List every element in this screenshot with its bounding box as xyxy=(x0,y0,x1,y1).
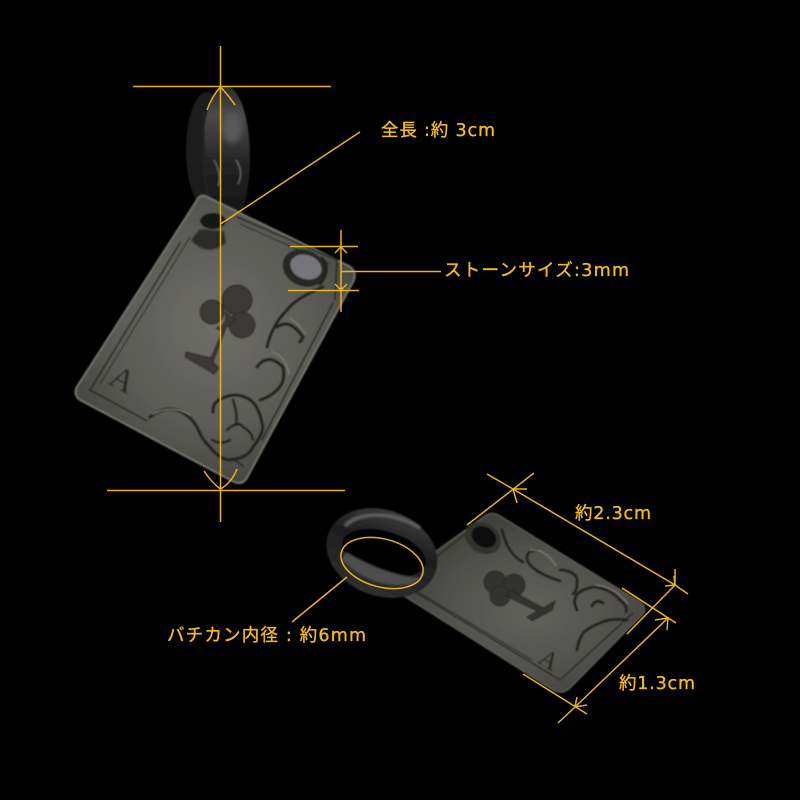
card body xyxy=(75,196,355,483)
arrow: bottom xyxy=(204,469,237,489)
card inner border xyxy=(90,217,337,466)
dimension: bail inner diameter xyxy=(292,529,429,622)
scroll ornament xyxy=(502,530,628,650)
pendant: upright view xyxy=(75,86,355,483)
arrow: width start xyxy=(513,489,527,503)
bail ring xyxy=(314,493,450,613)
leader: stone size xyxy=(341,270,441,272)
dimension: stone size xyxy=(288,230,441,312)
card body xyxy=(393,514,645,692)
letter A: A xyxy=(534,644,563,677)
icon: club suit xyxy=(484,571,555,621)
leader: bail diameter xyxy=(292,577,347,622)
label: 2.3cm: 約2.3cm xyxy=(575,504,651,524)
label: 1.3cm: 約1.3cm xyxy=(619,674,695,694)
dimension: total length xyxy=(107,46,360,522)
arrow: height end xyxy=(575,697,587,707)
scroll ornament xyxy=(150,287,323,460)
black stone xyxy=(276,242,332,294)
arrow: top xyxy=(207,87,235,110)
dimension: width 2.3cm xyxy=(467,473,688,634)
pendant: lying view xyxy=(314,493,645,692)
leader: total length xyxy=(220,132,360,224)
arrow: stone top xyxy=(335,247,347,253)
letter A: A xyxy=(103,359,142,402)
bail joint xyxy=(200,213,226,229)
bail ring xyxy=(186,86,250,230)
arrow: width end xyxy=(665,576,675,586)
card inner border xyxy=(402,524,633,680)
dimension: height 1.3cm xyxy=(523,588,676,723)
icon: club suit xyxy=(185,285,255,374)
arrow: height start xyxy=(655,618,668,630)
label: bail inner diameter: バチカン内径 : 約6mm xyxy=(167,626,366,646)
arrow: stone bottom xyxy=(335,284,347,290)
label: total length: 全長 :約 3cm xyxy=(381,121,495,141)
label: stone size: ストーンサイズ:3mm xyxy=(444,261,629,281)
black stone xyxy=(459,516,507,560)
